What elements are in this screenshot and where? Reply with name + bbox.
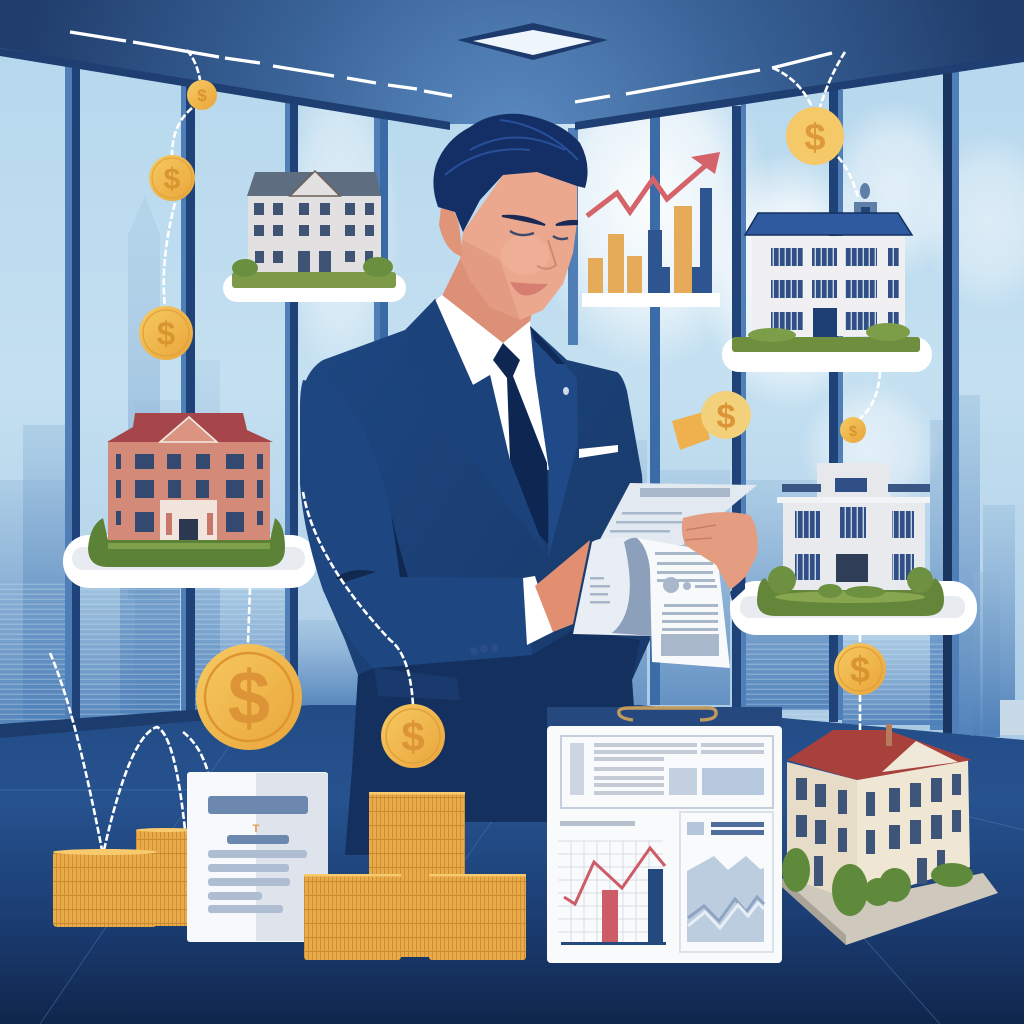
- nose: [537, 240, 556, 269]
- shirt cuff: [523, 576, 553, 645]
- pocket square: [579, 445, 618, 458]
- coin: mid left: $: [157, 315, 175, 352]
- background: office windows and skyline: [0, 0, 1024, 760]
- coin: small top-left: $: [197, 86, 207, 105]
- coin: small right: [840, 417, 866, 443]
- person: businessman in navy suit: [300, 114, 650, 855]
- window sill shadow band: [0, 702, 300, 738]
- elbow fold: [335, 570, 376, 582]
- coin: lower right: [834, 643, 886, 695]
- line and bar chart: [558, 821, 666, 945]
- ear: [439, 206, 463, 257]
- ceiling: [0, 0, 1024, 130]
- left face windows: [796, 778, 847, 886]
- jaw shade: [460, 240, 520, 320]
- coin: small top-left: [187, 80, 217, 110]
- hair: [433, 114, 588, 232]
- lower jacket shade: [345, 630, 642, 855]
- right face windows: [866, 774, 961, 884]
- coin: top right: [786, 107, 844, 165]
- property: red brick building on shelf: [63, 413, 317, 588]
- tie: [493, 343, 549, 545]
- coin: tilted with motion: [672, 391, 751, 450]
- holding hand: [682, 512, 758, 590]
- coin: small right: $: [849, 423, 858, 440]
- shrubs: [782, 848, 973, 916]
- floor: [0, 705, 1024, 1024]
- ceiling dashed lines: [70, 32, 832, 102]
- near arm sleeve: [300, 380, 532, 668]
- coin: on jacket: $: [401, 713, 425, 760]
- closed eyes: [510, 231, 568, 239]
- coin: large: [196, 644, 302, 750]
- sleeve buttons: [470, 644, 499, 655]
- hair strands: [445, 120, 578, 175]
- coin: upper left: [149, 155, 195, 201]
- coin stacks left: [53, 828, 196, 927]
- coin: top right: $: [804, 117, 826, 159]
- curled back: [573, 538, 652, 636]
- arm crease: [391, 513, 408, 577]
- eyebrows: [502, 216, 577, 225]
- suit body: [300, 299, 650, 855]
- window frames: [65, 60, 959, 735]
- neck: [442, 255, 535, 345]
- front page: [637, 538, 730, 668]
- property: large model house on base: [782, 724, 998, 945]
- document card with bars: [187, 772, 328, 942]
- ceiling light: [457, 23, 608, 60]
- left lapel: [407, 299, 547, 555]
- document card with bars: T: [253, 823, 260, 835]
- top section: [561, 736, 773, 808]
- property: grey manor on shelf: [223, 171, 406, 302]
- clipboard report: [547, 707, 782, 963]
- coin: tilted with motion: $: [717, 398, 736, 436]
- receipt document in hands: [573, 483, 758, 668]
- right lapel: [530, 326, 578, 559]
- coin: upper left: $: [164, 163, 181, 196]
- cheek highlight: [501, 235, 549, 275]
- property: blue roof mansion on shelf: [722, 183, 932, 372]
- area chart panel: [680, 812, 773, 952]
- coin: lower right: $: [850, 649, 870, 690]
- top sheet: [597, 483, 757, 545]
- coin: mid left: [139, 306, 193, 360]
- dashed money flow paths: [50, 50, 880, 850]
- smile: [510, 282, 548, 296]
- hand on paper roll: [535, 540, 590, 632]
- property: white classical building on shelf: [730, 463, 977, 635]
- bar chart with rising arrow on shelf: [582, 152, 720, 307]
- lapel pin: [563, 387, 569, 395]
- floor perspective lines: [0, 730, 1024, 1024]
- coin stacks centre: [304, 792, 526, 960]
- clip: [619, 708, 716, 720]
- shirt and collar: [432, 295, 549, 470]
- pocket flap: [374, 668, 460, 700]
- far sleeve: [730, 577, 745, 601]
- face: [460, 170, 577, 320]
- coin: on jacket: [381, 704, 445, 768]
- coin: large: $: [228, 656, 270, 741]
